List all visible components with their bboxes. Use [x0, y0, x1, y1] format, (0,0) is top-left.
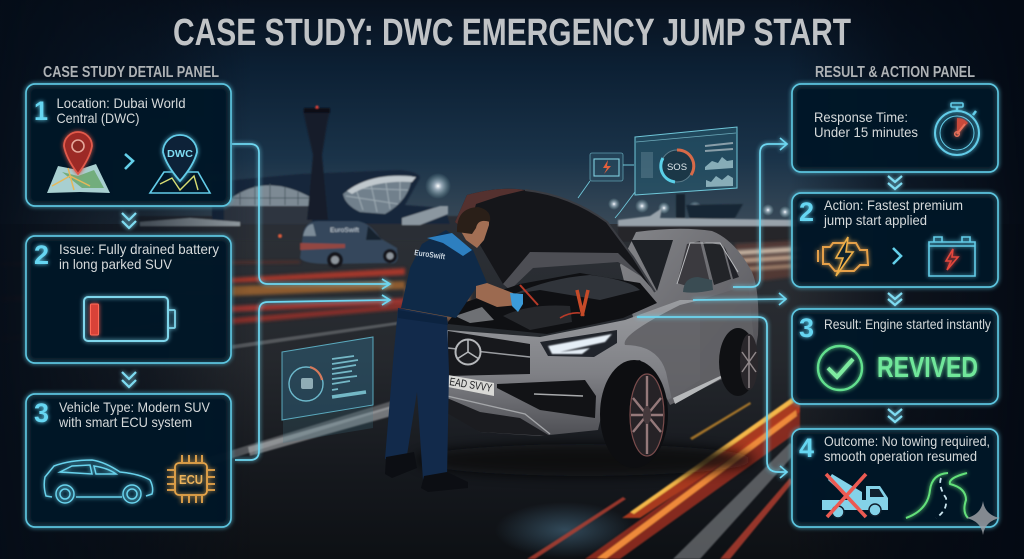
open bonnet [455, 189, 655, 292]
windshield and side windows [631, 240, 739, 291]
icon: crossed-out tow truck [822, 474, 888, 518]
icon: winding road [906, 473, 968, 518]
connector: car to outcome [637, 317, 787, 478]
chevron down [122, 213, 136, 228]
wheel arch and door sheen [625, 285, 754, 400]
technician legs and shoes [385, 308, 468, 492]
service van [300, 221, 398, 268]
vehicle text: with smart ECU system [58, 414, 192, 430]
head [457, 207, 490, 248]
icon: drained battery [84, 297, 175, 341]
panel: location [26, 84, 231, 206]
chevron [125, 154, 133, 169]
panel: outcome [792, 429, 998, 527]
technician: EuroSwift [414, 248, 446, 261]
number 2: 2 [34, 240, 49, 270]
issue text: Issue: Fully drained battery [59, 241, 219, 257]
car body side [620, 229, 758, 405]
number 2: 2 [799, 197, 814, 227]
chevron down [888, 409, 902, 422]
headlight [540, 330, 617, 357]
lights along the horizon [425, 173, 791, 218]
connector: car to response time [733, 138, 787, 287]
service van: EuroSwift [330, 227, 359, 234]
issue text: in long parked SUV [59, 256, 173, 272]
holographic dashboard on the ground [282, 337, 373, 443]
revived label: REVIVED [877, 352, 978, 384]
panel: result [792, 309, 998, 404]
result text: Result: Engine started instantly [824, 316, 991, 332]
icon: map with red pin [47, 132, 110, 193]
panel: vehicle type [26, 394, 231, 527]
shoulder stripe [427, 233, 472, 256]
holographic battery tile [578, 153, 635, 218]
technician torso [401, 230, 487, 318]
icon: ECU chip: ECU [179, 472, 203, 487]
chevron down [888, 293, 902, 305]
outcome text: Outcome: No towing required, [824, 433, 990, 449]
number 3: 3 [799, 313, 814, 343]
holographic dashboard: SOS gauge [635, 127, 737, 195]
panel: issue [26, 236, 231, 363]
icon: battery [929, 237, 975, 276]
chevron down [122, 372, 136, 387]
location text: Central (DWC) [56, 110, 140, 126]
icon: DWC location pin [150, 135, 210, 193]
vehicle text: Vehicle Type: Modern SUV [59, 399, 211, 415]
airport terminal and control tower [130, 106, 470, 240]
response text: Under 15 minutes [814, 124, 918, 140]
lower bumper [447, 380, 596, 436]
number 1: 1 [34, 96, 48, 126]
action text: jump start applied [823, 212, 927, 228]
technician [385, 207, 523, 492]
heading: result and action panel: RESULT & ACTION PANEL [815, 64, 975, 81]
icon: stopwatch [935, 103, 979, 155]
action text: Action: Fastest premium [824, 197, 963, 213]
far-side airport buildings and planes [618, 194, 848, 242]
panel: response time [792, 84, 998, 172]
response text: Response Time: [814, 109, 908, 125]
engine bay [448, 273, 657, 334]
arm and glove [476, 283, 523, 312]
icon: engine warning [818, 237, 868, 276]
speed light streaks [0, 240, 800, 559]
licence plate: EAD SVVY [449, 376, 493, 395]
holographic dashboard: SOS gauge: SOS [667, 162, 687, 173]
icon: ECU chip [167, 455, 215, 503]
front body [447, 300, 700, 436]
front wheel [600, 360, 668, 468]
outcome text: smooth operation resumed [824, 448, 977, 464]
number 4: 4 [799, 433, 814, 463]
wing mirror [683, 277, 713, 293]
icon: SUV outline [44, 460, 153, 503]
title: CASE STUDY: DWC EMERGENCY JUMP START [173, 12, 851, 54]
number 3: 3 [34, 398, 49, 428]
connector: panel 1 to car [232, 144, 390, 289]
location text: Location: Dubai World [56, 95, 186, 111]
connector: panel 3 to car [235, 295, 390, 460]
panel: action [792, 193, 998, 287]
grille and badge [448, 331, 530, 376]
chevron down [888, 176, 902, 189]
chevron [893, 248, 901, 264]
connector: car to result [693, 293, 786, 305]
rear wheel [719, 328, 758, 396]
heading: case study detail panel: CASE STUDY DETAIL PANEL [43, 64, 219, 81]
icon: green check [818, 346, 862, 390]
watermark sparkle [966, 501, 1000, 535]
icon: DWC location pin: DWC [167, 148, 193, 160]
SUV car [415, 189, 758, 476]
